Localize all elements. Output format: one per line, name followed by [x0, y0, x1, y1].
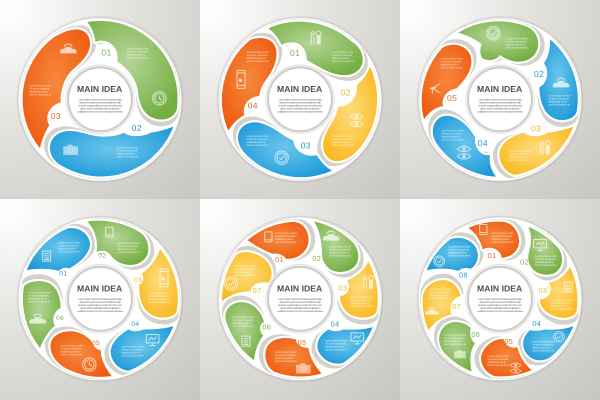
center circle: et dolore magna aliqua ut enim ad minim veni: [78, 303, 123, 307]
outer disc: [18, 217, 182, 380]
segment 02: 02: [520, 257, 529, 266]
segment 03: [238, 122, 332, 177]
segment 02: sed do eiusmod te: [548, 102, 571, 106]
outer disc: [418, 217, 582, 380]
segment 03: adipiscing elit a: [247, 140, 265, 144]
segment 01: sit amet consecte: [332, 53, 353, 57]
segment 03: Lorem ipsum dolor: [351, 295, 373, 299]
segment 06: 06: [262, 322, 271, 331]
center circle: quis nostrud exercitation ullamco laboris ni: [80, 106, 121, 110]
segment 04: Lorem ipsum dolor: [247, 50, 269, 54]
outer disc: [218, 217, 382, 380]
segment 02: sit amet consecte: [332, 137, 353, 141]
segment 06: sit amet consecte: [444, 336, 466, 340]
center circle: [266, 65, 334, 134]
segment 03: Lorem ipsum dolor: [509, 149, 531, 153]
panel: five-part cycle: [400, 0, 600, 199]
segment 08: sed do eiusmod te: [448, 253, 471, 257]
panel: three-part cycle: [0, 0, 200, 199]
segment 01: 01: [488, 251, 496, 260]
segment 02: adipiscing elit a: [117, 247, 136, 251]
segment 01: Lorem ipsum dolor: [332, 50, 354, 54]
segment 04: 04: [331, 319, 339, 328]
segment 06: sed do eiusmod te: [28, 299, 51, 303]
segment 05: 05: [447, 93, 457, 103]
segment 06: Lorem ipsum dolor: [444, 333, 466, 337]
segment 07: adipiscing elit a: [234, 270, 253, 274]
segment 06: adipiscing elit a: [28, 296, 47, 300]
center circle: [466, 264, 534, 333]
segment 04: sit amet consecte: [325, 341, 347, 345]
center circle: et dolore magna aliqua ut enim ad minim veni: [278, 303, 323, 307]
segment 01: sed do eiusmod te: [275, 240, 297, 244]
segment 04: [317, 319, 373, 364]
center circle: elit sed do eiusmod tempor incididunt ut lab: [79, 300, 121, 304]
segment 08: sit amet consecte: [448, 247, 470, 251]
segment 04: Lorem ipsum dolor: [533, 339, 555, 343]
segment 06: Lorem ipsum dolor: [232, 315, 254, 319]
segment 01: sed do eiusmod te: [58, 249, 81, 253]
segment 05: sit amet consecte: [487, 357, 509, 361]
segment 03: 03: [51, 111, 61, 121]
segment 04: 04: [248, 100, 258, 110]
center circle: MAIN IDEA: [277, 84, 323, 94]
segment 05: 05: [504, 337, 513, 346]
center circle: Lorem ipsum dolor sit amet consectetur adip: [79, 297, 122, 301]
segment 01: [27, 228, 90, 277]
segment 01: [468, 222, 519, 260]
segment 03: sit amet consecte: [29, 87, 51, 91]
segment 03: 03: [531, 123, 541, 133]
center circle: elit sed do eiusmod tempor incididunt ut lab: [79, 100, 121, 104]
segment 01: [87, 21, 178, 120]
segment 03: Lorem ipsum dolor: [247, 134, 269, 138]
segment 02: adipiscing elit a: [535, 260, 554, 264]
center circle: Lorem ipsum dolor sit amet consectetur adip: [279, 97, 322, 101]
segment 02: [323, 67, 377, 161]
segment 03: [23, 29, 90, 148]
segment 02: 02: [312, 254, 321, 263]
segment 01: 01: [483, 49, 493, 59]
segment 03: sed do eiusmod te: [247, 143, 269, 147]
segment 01: adipiscing elit a: [332, 56, 350, 60]
segment 05: [50, 331, 112, 377]
segment 05: Lorem ipsum dolor: [487, 354, 509, 358]
panel: eight-part cycle: [400, 199, 600, 400]
segment 02: Lorem ipsum dolor: [329, 244, 351, 248]
segment 07: [222, 252, 272, 301]
segment 04: sit amet consecte: [247, 53, 268, 57]
center circle: MAIN IDEA: [77, 84, 123, 94]
center circle: Lorem ipsum dolor sit amet consectetur adip: [479, 297, 522, 301]
segment 01: sed do eiusmod te: [332, 59, 354, 63]
segment 04: [111, 321, 173, 371]
segment 06: adipiscing elit a: [444, 339, 463, 343]
outer disc: [18, 18, 182, 181]
outer disc: [218, 18, 382, 181]
segment 01: sed do eiusmod te: [127, 56, 149, 60]
segment 04: sed do eiusmod te: [247, 59, 269, 63]
segment 05: adipiscing elit a: [441, 63, 459, 67]
segment 01: 01: [101, 48, 112, 58]
segment 05: Lorem ipsum dolor: [61, 343, 83, 347]
segment 02: sed do eiusmod te: [117, 250, 140, 254]
segment 01: sit amet consecte: [492, 234, 513, 238]
segment 04: adipiscing elit a: [442, 134, 460, 138]
center circle: Lorem ipsum dolor sit amet consectetur adip: [279, 297, 322, 301]
segment 02: [87, 221, 148, 265]
segment 03: sed do eiusmod te: [509, 158, 531, 162]
segment 01: 01: [290, 48, 300, 58]
segment 04: sed do eiusmod te: [533, 348, 555, 352]
segment 02: [50, 123, 173, 176]
segment 01: sit amet consecte: [127, 50, 148, 54]
segment 03: sed do eiusmod te: [551, 307, 573, 311]
center circle: elit sed do eiusmod tempor incididunt ut lab: [279, 300, 321, 304]
segment 01: adipiscing elit a: [506, 43, 525, 47]
segment 03: Lorem ipsum dolor: [148, 291, 170, 295]
center circle: elit sed do eiusmod tempor incididunt ut lab: [479, 100, 521, 104]
center circle: quis nostrud exercitation ullamco laboris ni: [280, 306, 321, 310]
segment 06: sit amet consecte: [28, 293, 50, 297]
segment 02: 02: [534, 69, 544, 79]
segment 05: [422, 45, 471, 119]
segment 04: 04: [478, 138, 488, 148]
center circle: MAIN IDEA: [77, 283, 123, 293]
segment 06: [225, 302, 271, 360]
segment 01: sed do eiusmod te: [492, 240, 514, 244]
segment 03: adipiscing elit a: [29, 90, 48, 94]
segment 02: sit amet consecte: [329, 247, 351, 251]
segment 03: sed do eiusmod te: [148, 300, 171, 304]
segment 02: sed do eiusmod te: [332, 143, 354, 147]
segment 02: sit amet consecte: [117, 148, 138, 152]
segment 03: sed do eiusmod te: [351, 304, 373, 308]
center circle: ut aliquip ex ea commodo consequat duis aute: [477, 109, 523, 113]
center circle: Lorem ipsum dolor sit amet consectetur adip: [79, 97, 122, 101]
segment 04: 04: [131, 321, 139, 328]
segment 04: Lorem ipsum dolor: [325, 338, 347, 342]
segment 03: 03: [301, 141, 311, 151]
segment 04: sed do eiusmod te: [325, 347, 348, 351]
segment 01: sit amet consecte: [506, 40, 527, 44]
segment 01: sed do eiusmod te: [506, 46, 528, 50]
segment 02: adipiscing elit a: [332, 140, 350, 144]
segment 03: [134, 249, 178, 318]
segment 01: [458, 21, 538, 62]
segment 03: adipiscing elit a: [509, 155, 528, 159]
center circle: Lorem ipsum dolor sit amet consectetur adip: [479, 97, 522, 101]
segment 03: [499, 123, 573, 175]
segment 04: adipiscing elit a: [247, 56, 265, 60]
segment 02: adipiscing elit a: [117, 151, 135, 155]
segment 01: Lorem ipsum dolor: [506, 37, 528, 41]
segment 02: sed do eiusmod te: [535, 263, 557, 267]
segment 05: sed do eiusmod te: [487, 363, 510, 367]
center circle: MAIN IDEA: [477, 283, 523, 293]
segment 08: adipiscing elit a: [448, 250, 467, 254]
segment 02: sit amet consecte: [548, 96, 570, 100]
segment 04: [433, 116, 496, 177]
segment 03: Lorem ipsum dolor: [551, 298, 573, 302]
center circle: MAIN IDEA: [477, 84, 523, 94]
center circle: [466, 65, 534, 134]
segment 02: sed do eiusmod te: [117, 154, 139, 158]
center circle: et dolore magna aliqua ut enim ad minim veni: [478, 303, 523, 307]
segment 06: sed do eiusmod te: [444, 342, 467, 346]
segment 05: sed do eiusmod te: [275, 359, 297, 363]
segment 03: adipiscing elit a: [351, 301, 369, 305]
segment 07: sit amet consecte: [234, 267, 255, 271]
segment 07: [423, 280, 461, 330]
segment 02: [534, 39, 578, 120]
segment 04: Lorem ipsum dolor: [442, 128, 464, 132]
segment 03: sit amet consecte: [351, 298, 372, 302]
segment 08: 08: [459, 270, 468, 279]
segment 04: adipiscing elit a: [325, 344, 344, 348]
center circle: [266, 264, 334, 333]
segment 02: 02: [98, 252, 106, 259]
segment 02: sed do eiusmod te: [329, 253, 352, 257]
segment 01: sit amet consecte: [275, 234, 296, 238]
segment 05: sit amet consecte: [61, 346, 82, 350]
segment 08: Lorem ipsum dolor: [448, 244, 470, 248]
segment 01: [268, 22, 363, 75]
segment 05: adipiscing elit a: [275, 356, 294, 360]
center circle: ut aliquip ex ea commodo consequat duis aute: [277, 109, 323, 113]
segment 03: adipiscing elit a: [551, 304, 569, 308]
panel: four-part cycle: [200, 0, 400, 199]
segment 02: adipiscing elit a: [548, 99, 567, 103]
segment 05: adipiscing elit a: [487, 360, 506, 364]
segment 01: 01: [59, 270, 67, 277]
segment 05: Lorem ipsum dolor: [441, 57, 463, 61]
segment 04: sit amet consecte: [122, 347, 143, 351]
segment 04: sit amet consecte: [533, 342, 554, 346]
segment 03: Lorem ipsum dolor: [29, 84, 51, 88]
segment 05: sit amet consecte: [275, 353, 296, 357]
segment 07: sed do eiusmod te: [429, 296, 452, 300]
segment 03: 03: [538, 286, 547, 295]
segment 06: sit amet consecte: [232, 318, 254, 322]
segment 02: [520, 227, 562, 275]
segment 07: Lorem ipsum dolor: [429, 287, 451, 291]
segment 04: adipiscing elit a: [533, 345, 551, 349]
center circle: [66, 264, 134, 333]
center circle: elit sed do eiusmod tempor incididunt ut lab: [279, 100, 321, 104]
segment 01: Lorem ipsum dolor: [127, 47, 149, 51]
segment 06: adipiscing elit a: [232, 321, 251, 325]
segment 04: sed do eiusmod te: [122, 353, 144, 357]
segment 03: [338, 261, 378, 318]
center circle: et dolore magna aliqua ut enim ad minim veni: [278, 103, 323, 107]
segment 07: 07: [452, 302, 461, 311]
center circle: ut aliquip ex ea commodo consequat duis aute: [277, 309, 323, 313]
segment 02: Lorem ipsum dolor: [117, 145, 139, 149]
segment 03: adipiscing elit a: [148, 297, 167, 301]
segment 01: Lorem ipsum dolor: [492, 231, 514, 235]
segment 07: sit amet consecte: [429, 290, 451, 294]
segment 06: Lorem ipsum dolor: [28, 290, 50, 294]
segment 01: Lorem ipsum dolor: [58, 240, 80, 244]
segment 03: sed do eiusmod te: [29, 93, 52, 97]
center circle: ut aliquip ex ea commodo consequat duis aute: [477, 309, 523, 313]
segment 01: 01: [275, 255, 284, 264]
segment 05: [481, 337, 532, 376]
segment 02: Lorem ipsum dolor: [332, 134, 354, 138]
segment 04: sit amet consecte: [442, 131, 463, 135]
segment 05: [265, 338, 322, 376]
segment 01: sit amet consecte: [58, 243, 80, 247]
segment 04: [523, 319, 573, 360]
segment 04: sed do eiusmod te: [442, 137, 464, 141]
panel: seven-part cycle: [200, 199, 400, 400]
segment 03: sit amet consecte: [509, 152, 530, 156]
segment 08: [427, 238, 478, 279]
segment 01: adipiscing elit a: [127, 53, 145, 57]
segment 07: sed do eiusmod te: [234, 273, 256, 277]
center circle: MAIN IDEA: [277, 283, 323, 293]
segment 05: 05: [298, 338, 306, 347]
segment 04: [222, 38, 277, 131]
segment 02: [312, 221, 358, 272]
segment 03: 03: [134, 277, 142, 284]
segment 06: [23, 281, 64, 348]
segment 04: 04: [532, 319, 541, 328]
center circle: quis nostrud exercitation ullamco laboris ni: [480, 106, 521, 110]
segment 06: 06: [56, 315, 64, 322]
center circle: quis nostrud exercitation ullamco laboris ni: [80, 306, 121, 310]
segment 01: adipiscing elit a: [275, 237, 294, 241]
segment 02: 02: [132, 123, 142, 133]
center circle: quis nostrud exercitation ullamco laboris ni: [280, 106, 321, 110]
segment 07: Lorem ipsum dolor: [234, 264, 256, 268]
segment 05: sed do eiusmod te: [441, 66, 463, 70]
segment 04: adipiscing elit a: [122, 350, 140, 354]
segment 04: Lorem ipsum dolor: [122, 344, 144, 348]
segment 02: Lorem ipsum dolor: [117, 241, 139, 245]
segment 02: Lorem ipsum dolor: [535, 254, 557, 258]
segment 03: sit amet consecte: [551, 301, 572, 305]
segment 06: 06: [471, 330, 480, 339]
segment 07: adipiscing elit a: [429, 293, 448, 297]
segment 05: adipiscing elit a: [61, 349, 79, 353]
segment 05: sit amet consecte: [441, 60, 462, 64]
segment 03: [538, 267, 577, 318]
segment 01: [248, 222, 309, 264]
center circle: ut aliquip ex ea commodo consequat duis aute: [77, 309, 123, 313]
segment 03: sit amet consecte: [247, 137, 268, 141]
center circle: et dolore magna aliqua ut enim ad minim veni: [78, 103, 123, 107]
center circle: quis nostrud exercitation ullamco laboris ni: [480, 306, 521, 310]
segment 02: adipiscing elit a: [329, 250, 348, 254]
segment 05: sed do eiusmod te: [61, 352, 83, 356]
segment 03: sit amet consecte: [148, 294, 170, 298]
center circle: [66, 65, 134, 134]
segment 01: Lorem ipsum dolor: [275, 231, 297, 235]
segment 02: Lorem ipsum dolor: [548, 93, 570, 97]
segment 07: 07: [253, 286, 261, 295]
segment 06: sed do eiusmod te: [232, 324, 255, 328]
segment 02: sit amet consecte: [117, 244, 139, 248]
segment 05: Lorem ipsum dolor: [275, 350, 297, 354]
segment 01: adipiscing elit a: [492, 237, 510, 241]
segment 02: sit amet consecte: [535, 257, 556, 261]
segment 03: 03: [338, 283, 347, 292]
center circle: elit sed do eiusmod tempor incididunt ut lab: [479, 300, 521, 304]
segment 06: [439, 322, 480, 371]
segment 01: adipiscing elit a: [58, 246, 77, 250]
panel: six-part cycle: [0, 199, 200, 400]
segment 05: 05: [92, 340, 100, 347]
outer disc: [418, 18, 582, 181]
segment 02: 02: [340, 88, 351, 98]
center circle: et dolore magna aliqua ut enim ad minim veni: [478, 103, 523, 107]
center circle: ut aliquip ex ea commodo consequat duis aute: [77, 109, 123, 113]
